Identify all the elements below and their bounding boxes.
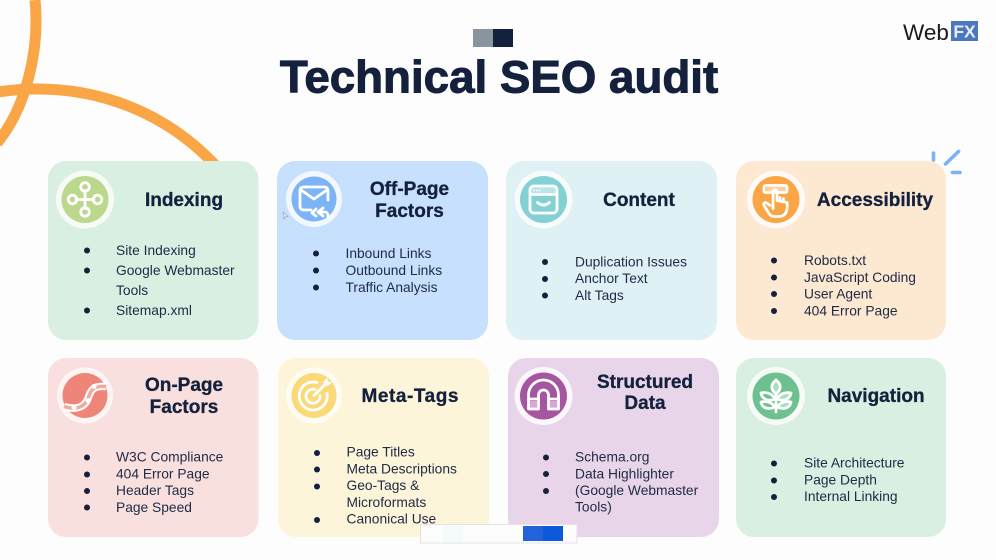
bullet list: Anchor Text: [575, 271, 648, 286]
icon: browser window with smile: [514, 170, 572, 228]
bullet list: Site Indexing: [116, 243, 196, 258]
panel: On-Page Factors: [48, 358, 258, 537]
WebFX logo: FX: [953, 22, 976, 42]
icon: indexing nodes: [56, 170, 114, 228]
heading: Meta-Tags: [362, 386, 458, 407]
bullet list: 404 Error Page: [804, 304, 898, 318]
WebFX logo: Web: [903, 20, 949, 45]
icon: target with arrow: [286, 368, 342, 424]
heading: Navigation: [827, 386, 925, 407]
bullet list: Inbound Links: [346, 246, 432, 261]
bullet list: [314, 445, 457, 526]
panel: Accessibility: [736, 161, 946, 340]
heading: On-Page: [145, 375, 223, 396]
bullet list: [543, 450, 699, 515]
panel: Navigation: [736, 358, 946, 537]
panel: Content: [506, 161, 717, 340]
icon: leaf sprig: [747, 367, 805, 425]
WebFX logo: [903, 20, 978, 45]
blue spark accent: [934, 152, 960, 172]
bullet list: [84, 243, 235, 318]
panel: On-Page Factors: Factors: [150, 397, 218, 418]
bullet list: Data Highlighter: [575, 466, 674, 482]
bullet list: Internal Linking: [804, 489, 898, 504]
heading: Accessibility: [817, 190, 934, 211]
bullet list: Sitemap.xml: [116, 303, 192, 318]
heading: Content: [603, 190, 676, 211]
bullet list: [542, 254, 687, 303]
heading: Structured: [597, 372, 693, 393]
bullet list: Google Webmaster: [116, 263, 235, 278]
bullet list: Meta Descriptions: [346, 462, 457, 476]
icon: pointing hand: [747, 170, 805, 228]
bullet list: Header Tags: [116, 483, 194, 498]
bullet list: Page Speed: [116, 500, 192, 515]
bullet list: Robots.txt: [804, 253, 866, 268]
decorative orange arcs: [0, 0, 218, 168]
icon: magnet: [514, 367, 572, 425]
panel: Indexing: [48, 161, 258, 340]
panel: Meta-Tags: [278, 358, 489, 537]
icon: email reply: [286, 171, 342, 227]
panel: Off-Page Factors: [277, 161, 488, 340]
icon: cursor: [283, 212, 288, 219]
bullet list: Outbound Links: [346, 263, 442, 278]
icon: winding road: [57, 368, 113, 424]
bullet list: Page Titles: [346, 445, 415, 460]
bullet list: Page Depth: [804, 472, 877, 488]
title: Technical SEO audit: [280, 52, 718, 102]
bullet list: Alt Tags: [575, 288, 624, 303]
bullet list: Schema.org: [575, 450, 649, 465]
bullet list: Tools: [116, 283, 148, 298]
panel: Off-Page Factors: Factors: [375, 201, 444, 222]
bullet list: JavaScript Coding: [804, 270, 916, 285]
bullet list: User Agent: [804, 286, 872, 302]
bullet list: Tools): [575, 500, 612, 515]
bullet list: Duplication Issues: [575, 254, 687, 270]
panel: Structured Data: Data: [624, 393, 666, 414]
bullet list: [771, 456, 905, 504]
bullet list: [84, 450, 224, 515]
panel: Structured Data: [508, 358, 719, 537]
bullet list: Traffic Analysis: [346, 280, 438, 295]
bottom toolbar widget: [420, 524, 577, 543]
bullet list: [771, 253, 916, 318]
bullet list: Microformats: [346, 495, 426, 510]
bullet list: Canonical Use: [346, 512, 437, 526]
bullet list: 404 Error Page: [116, 466, 210, 482]
bullet list: Site Architecture: [804, 456, 905, 471]
bullet list: Geo-Tags &: [346, 478, 419, 493]
title accent blocks: [473, 29, 513, 47]
bullet list: W3C Compliance: [116, 450, 224, 465]
heading: Indexing: [145, 190, 223, 211]
heading: Off-Page: [370, 179, 449, 200]
bullet list: [313, 246, 442, 295]
bullet list: (Google Webmaster: [575, 483, 699, 498]
